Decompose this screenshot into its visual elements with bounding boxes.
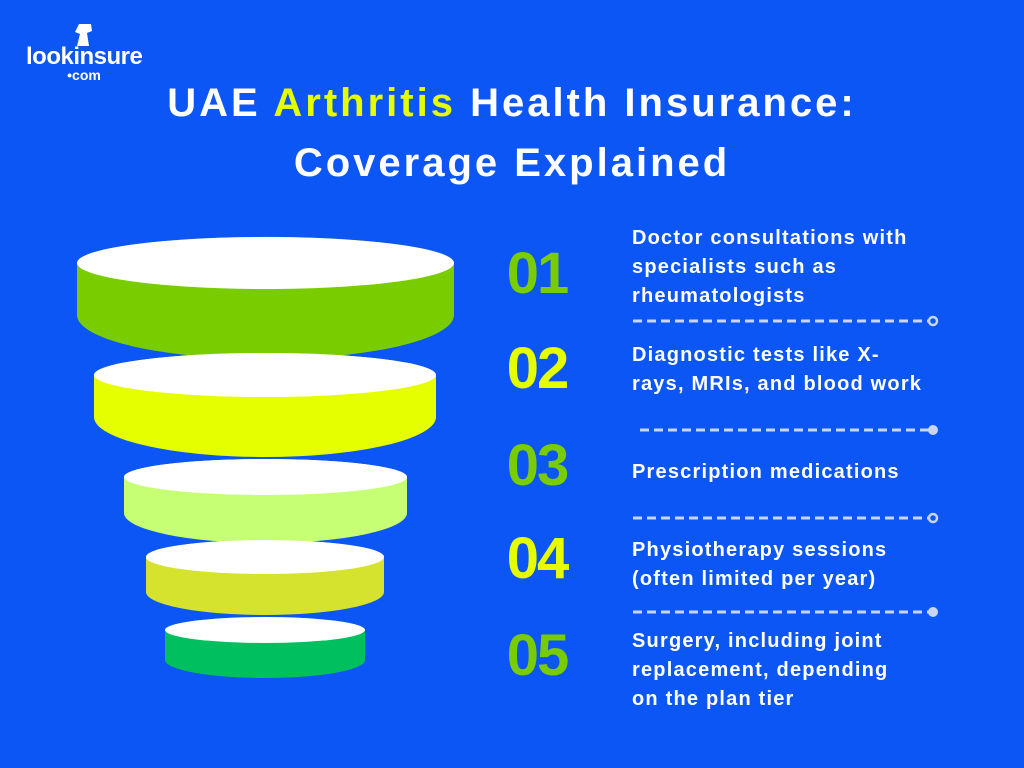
text 03: Prescription medications	[632, 461, 900, 483]
logo	[26, 24, 142, 83]
title	[167, 81, 857, 185]
text 04	[632, 539, 887, 590]
text 01: Doctor consultations with	[632, 227, 908, 249]
text 02	[632, 344, 922, 395]
number 01: 01	[507, 241, 567, 306]
logo: lookinsure	[26, 43, 142, 70]
text 04: (often limited per year)	[632, 568, 876, 590]
text 01: specialists such as	[632, 256, 837, 278]
text 01	[632, 227, 908, 307]
title: UAE Arthritis Health Insurance:	[167, 81, 857, 125]
number 02: 02	[507, 336, 567, 401]
text 05: replacement, depending	[632, 659, 888, 681]
text 05: on the plan tier	[632, 688, 795, 710]
text 02: Diagnostic tests like X-	[632, 344, 880, 366]
text 04: Physiotherapy sessions	[632, 539, 887, 561]
title: Coverage Explained	[294, 141, 730, 185]
funnel chart	[77, 236, 454, 678]
number 03: 03	[507, 433, 567, 498]
number 04: 04	[507, 526, 567, 591]
text 02: rays, MRIs, and blood work	[632, 373, 922, 395]
logo: •com	[67, 67, 101, 83]
text 05	[632, 630, 888, 710]
number 05: 05	[507, 623, 567, 688]
text 01: rheumatologists	[632, 285, 806, 307]
text 05: Surgery, including joint	[632, 630, 883, 652]
